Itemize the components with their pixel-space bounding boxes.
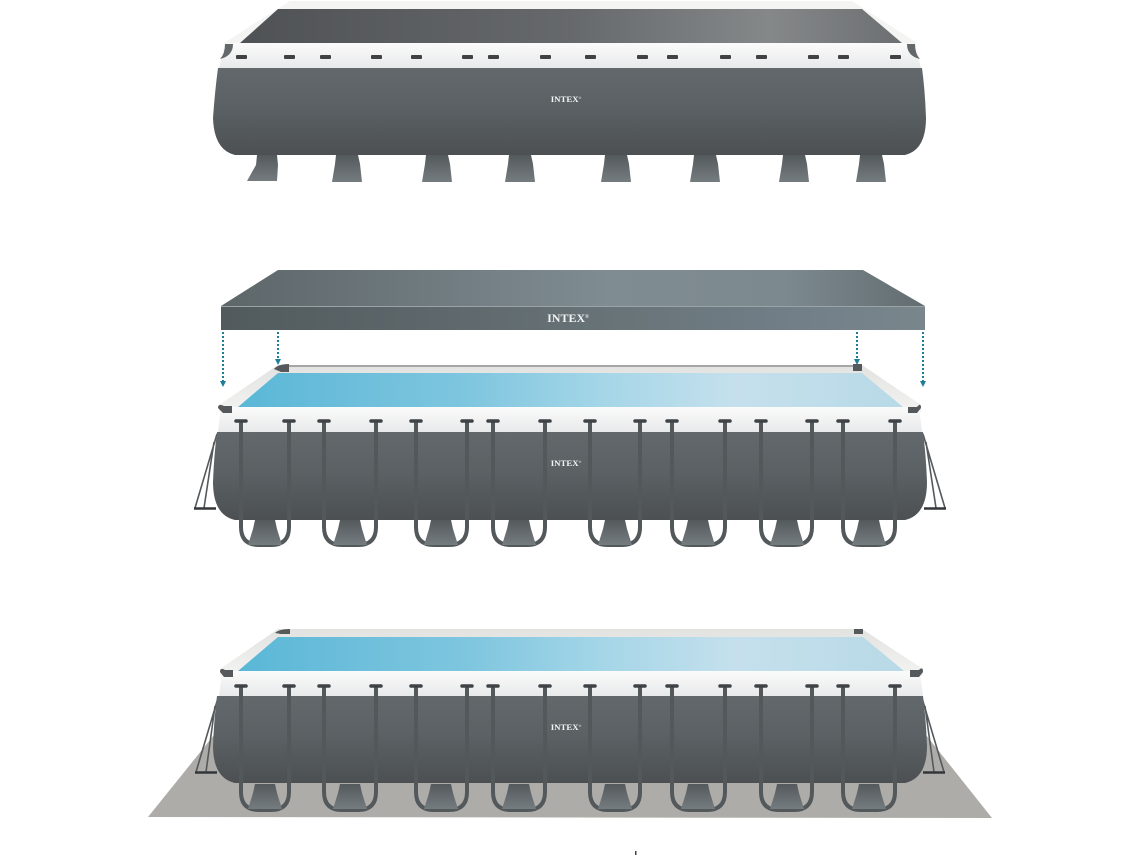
white band — [219, 671, 923, 696]
feet — [248, 784, 886, 809]
water — [238, 373, 903, 407]
water — [238, 637, 904, 671]
U legs — [236, 421, 900, 545]
logo: ® — [579, 723, 582, 728]
bottom tick — [635, 851, 636, 855]
ground sheet — [148, 735, 992, 818]
corner caps — [218, 364, 921, 413]
pool 1: covered pool — [213, 1, 926, 182]
feet — [247, 155, 886, 182]
top rim — [224, 1, 917, 43]
pool body — [213, 432, 927, 520]
pool 3: pool on ground sheet — [148, 629, 992, 818]
cover sheet — [221, 270, 925, 330]
logo: INTEX — [547, 311, 585, 325]
pool 2: open pool with frame — [194, 364, 946, 545]
logo: ® — [579, 459, 582, 464]
ladder side frames — [194, 434, 946, 508]
logo: ® — [579, 95, 582, 100]
corner brackets — [220, 44, 920, 59]
rim — [220, 629, 923, 676]
pool body — [213, 68, 926, 155]
strap slots — [236, 55, 901, 59]
rim — [219, 365, 921, 412]
ladder side frames — [195, 698, 945, 772]
cover front face — [221, 306, 925, 330]
logo: INTEX — [551, 94, 579, 104]
cover top — [240, 9, 902, 43]
logo: INTEX — [551, 722, 579, 732]
white band — [218, 407, 922, 432]
cover top face — [221, 270, 925, 306]
logo: ® — [585, 314, 589, 320]
corner caps — [220, 629, 923, 677]
logo: INTEX — [551, 458, 579, 468]
white band — [219, 43, 921, 68]
U legs — [236, 686, 900, 810]
placement arrows — [220, 332, 926, 387]
feet — [248, 520, 886, 545]
pool body — [213, 696, 927, 783]
